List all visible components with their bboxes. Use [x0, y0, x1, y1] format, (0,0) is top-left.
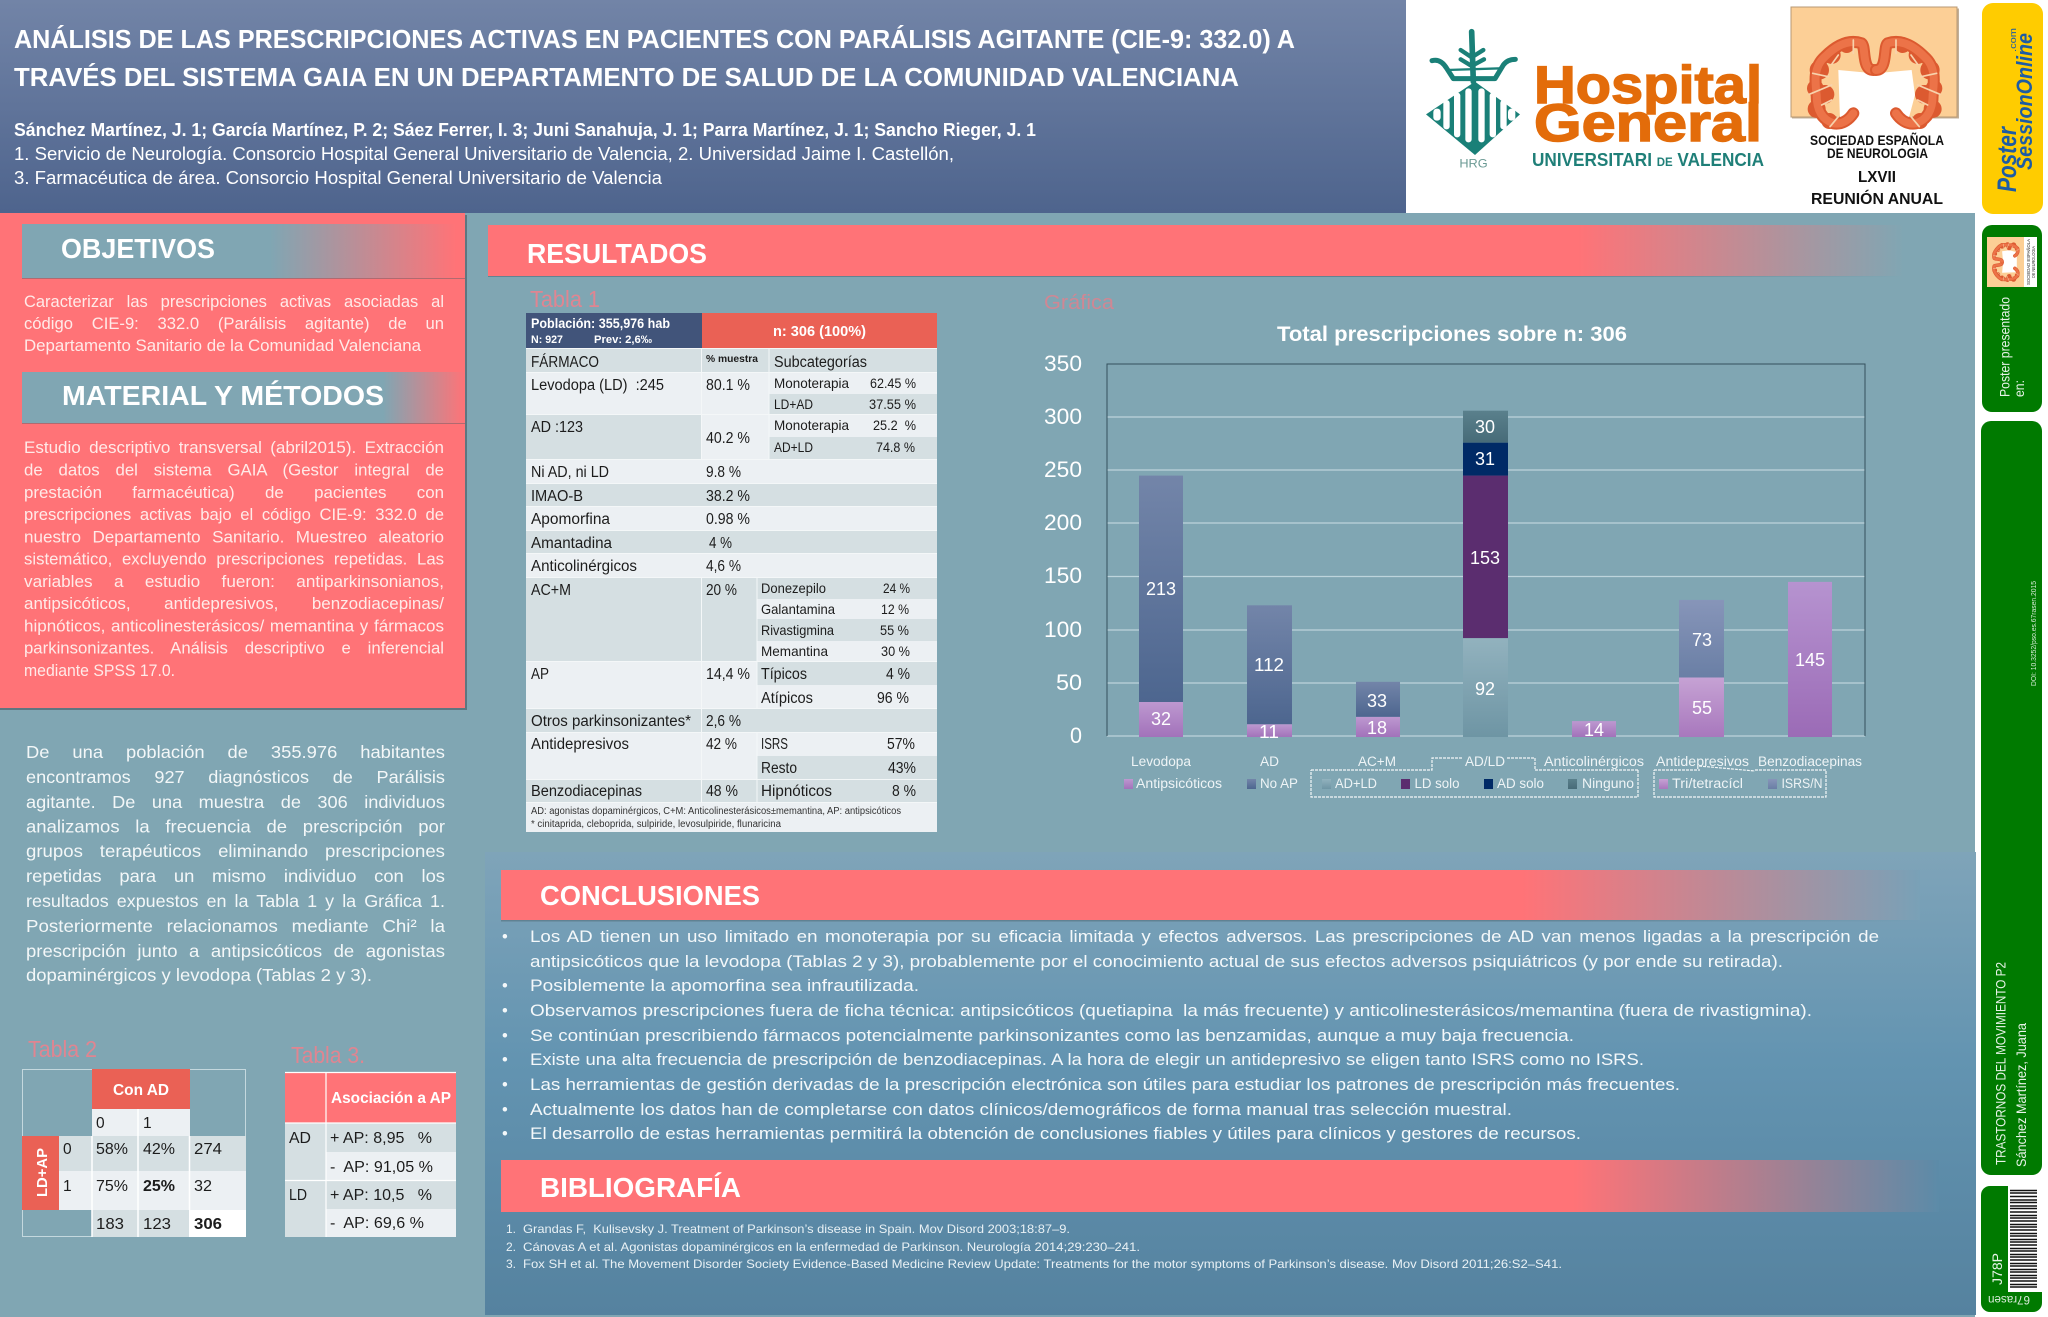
- table 2: 42%: [143, 1141, 175, 1158]
- bullets: conclusiones: •: [502, 1002, 508, 1020]
- table text: Benzodiacepinas: [531, 783, 642, 800]
- legend: [1124, 776, 1822, 791]
- barcode: [2010, 1190, 2037, 1287]
- table text: 25.2 %: [873, 417, 916, 433]
- logo: Sociedad Española de Neurología: [1791, 7, 1959, 208]
- table 1 label: Tabla 1: [530, 286, 600, 312]
- table text: Antidepresivos: [531, 736, 629, 753]
- icon: mini society logo: SOCIEDAD ESPAÑOLA: [2025, 239, 2031, 285]
- table text: IMAO-B: [531, 488, 583, 505]
- x axis labels: AD/LD: [1465, 754, 1505, 769]
- society name: DE NEUROLOGIA: [1827, 145, 1928, 161]
- heading: material y metodos: MATERIAL Y MÉTODOS: [62, 380, 384, 411]
- table header: n: 306 (100%): [773, 323, 866, 340]
- bullets: conclusiones: •: [502, 1125, 508, 1143]
- table 2: 58%: [96, 1141, 128, 1158]
- y axis labels: 100: [1044, 617, 1082, 642]
- table 2: 0: [96, 1115, 105, 1132]
- table text: % muestra: [706, 353, 758, 365]
- bar: Antidepresivos: 55: [1692, 698, 1712, 718]
- table text: 0.98 %: [706, 511, 750, 528]
- bullets: conclusiones: •: [502, 1101, 508, 1119]
- sidebar: poster session online logo: Poster: [1992, 126, 2022, 192]
- table text: 8 %: [892, 783, 916, 800]
- table text: AP: [531, 666, 549, 683]
- heading: bibliografia: [501, 1160, 1939, 1212]
- table text: Donezepilo: [761, 580, 826, 596]
- text: material y metodos: parkinsonizantes. Análisis descriptivo e inferencial: [24, 640, 444, 658]
- bullets: conclusiones: [502, 928, 1879, 1143]
- table 2: 274: [194, 1141, 222, 1158]
- heading: conclusiones: [501, 870, 1920, 922]
- table 2: 1: [143, 1115, 152, 1132]
- bullets: conclusiones: •: [502, 977, 508, 995]
- table text: 24 %: [883, 580, 910, 596]
- bar: AD/LD: 30: [1475, 417, 1495, 437]
- bar: Benzodiacepinas: [1788, 582, 1832, 737]
- table footnote: [531, 806, 901, 830]
- meeting label: REUNIÓN ANUAL: [1811, 189, 1943, 208]
- sidebar: barcode tag: [1981, 1186, 2042, 1312]
- bar: Levodopa: 32: [1151, 709, 1171, 729]
- table 2 label: Tabla 2: [28, 1036, 97, 1062]
- text: material y metodos: antipsicóticos, antidepresivos, benzodiacepinas/: [24, 595, 444, 613]
- sidebar: barcode tag: 67rasen: [1988, 1293, 2030, 1307]
- society name: [1810, 131, 1944, 161]
- x axis labels: Antidepresivos: [1656, 754, 1749, 769]
- table header: Prev: 2,6‰: [594, 334, 652, 346]
- table 1: [526, 286, 937, 832]
- text block: resultados summary: repetidas para un mismo individuo con los: [26, 866, 445, 886]
- x axis labels: [1131, 754, 1862, 769]
- bullets: conclusiones: El desarrollo de estas herramientas permitirá la obtención de conclusiones fiables y útiles para clínicos y gestores de recursos.: [530, 1125, 1581, 1143]
- table 3: [285, 1042, 456, 1237]
- table text: Memantina: [761, 643, 828, 659]
- table text: 4 %: [886, 666, 910, 683]
- bar: AD: 112: [1254, 655, 1284, 675]
- table text: 30 %: [881, 643, 910, 659]
- y axis labels: 300: [1044, 404, 1082, 429]
- sidebar: barcode tag: J78P: [1989, 1253, 2005, 1285]
- icon: brain: [1807, 37, 1942, 129]
- panel: conclusiones and bibliografia: [485, 852, 1976, 1315]
- table text: Monoterapia: [774, 417, 849, 433]
- bar: Antidepresivos: 73: [1692, 630, 1712, 650]
- text block: resultados summary: prescripción junto a antipsicóticos de agonistas: [26, 941, 445, 961]
- sidebar: poster session online logo: .com: [2008, 28, 2018, 52]
- table 3: - AP: 91,05 %: [330, 1159, 433, 1176]
- table text: 12 %: [881, 601, 909, 617]
- bar: AD: 11: [1259, 722, 1279, 742]
- text: objetivos: código CIE-9: 332.0 (Parálisis agitante) de un: [24, 315, 444, 333]
- sidebar: poster presentado en: Poster presentado: [1996, 297, 2012, 397]
- bar: Levodopa: 213: [1146, 579, 1176, 599]
- bullets: conclusiones: Las herramientas de gestión derivadas de la prescripción electrónica son útiles para estudiar los patrones de prescripción más frecuentes.: [530, 1076, 1680, 1094]
- table text: 14,4 %: [706, 666, 750, 683]
- table footnote: AD: agonistas dopaminérgicos, C+M: Anticolinesterásicos±memantina, AP: antipsicóticos: [531, 806, 901, 817]
- table text: Rivastigmina: [761, 622, 834, 638]
- legend grouping brackets: [1311, 758, 1826, 797]
- text: objetivos: [24, 293, 444, 355]
- sidebar: poster presentado en: en:: [2011, 380, 2027, 397]
- header: title and authors: [0, 0, 1406, 213]
- icon: mini society logo: [1987, 237, 2037, 287]
- table text: 48 %: [706, 783, 738, 800]
- bullets: conclusiones: Los AD tienen un uso limitado en monoterapia por su eficacia limitada y efectos adversos. Las prescripciones de AD van menos ligadas a la prescripción de: [530, 928, 1879, 946]
- x axis labels: Levodopa: [1131, 754, 1191, 769]
- table text: 74.8 %: [876, 439, 915, 455]
- bar: AD/LD: 92: [1475, 679, 1495, 699]
- bullets: conclusiones: Actualmente los datos han de completarse con datos clínicos/demográficos de forma manual tras selección muestral.: [530, 1101, 1512, 1119]
- bar: AC+M: [1356, 682, 1400, 738]
- table text: AD :123: [531, 419, 583, 436]
- table text: 37.55 %: [869, 396, 916, 412]
- text block: resultados summary: dopaminérgicos y levodopa (Tablas 2 y 3).: [26, 965, 372, 985]
- y axis labels: 50: [1056, 670, 1082, 695]
- text: objetivos: Departamento Sanitario de la Comunidad Valenciana: [24, 337, 422, 355]
- legend: LD solo: [1414, 776, 1460, 791]
- text: material y metodos: Estudio descriptivo transversal (abril2015). Extracción: [24, 439, 444, 457]
- legend: AD solo: [1497, 776, 1544, 791]
- table text: Típicos: [761, 666, 807, 683]
- wordmark: General: [1534, 94, 1762, 153]
- table footnote: * cinitaprida, cleboprida, sulpiride, levosulpiride, flunaricina: [531, 819, 781, 830]
- text block: resultados summary: De una población de 355.976 habitantes: [26, 742, 445, 762]
- table 2: LD+AP: [34, 1148, 51, 1197]
- x axis labels: Anticolinérgicos: [1544, 754, 1644, 769]
- y axis labels: 250: [1044, 457, 1082, 482]
- table 2: [22, 1036, 246, 1237]
- table text: 2,6 %: [706, 713, 741, 730]
- references: 2.: [506, 1240, 516, 1254]
- text block: resultados summary: grupos terapéuticos eliminando prescripciones: [26, 841, 445, 861]
- icon: mini society logo: DE NEUROLOGIA: [2031, 246, 2036, 278]
- table header: N: 927: [531, 334, 563, 346]
- bullets: conclusiones: Existe una alta frecuencia de prescripción de benzodiacepinas. A la hora de elegir un antidepresivo se eligen tanto ISRS como no ISRS.: [530, 1051, 1644, 1069]
- text block: resultados summary: [26, 742, 445, 985]
- table 3: AD: [289, 1130, 311, 1147]
- title: TRAVÉS DEL SISTEMA GAIA EN UN DEPARTAMENTO DE SALUD DE LA COMUNIDAD VALENCIANA: [14, 62, 1239, 92]
- table header: Población: 355,976 hab: [531, 316, 670, 331]
- bullets: conclusiones: Posiblemente la apomorfina sea infrautilizada.: [530, 977, 919, 995]
- table text: Amantadina: [531, 535, 612, 552]
- table 2: 1: [63, 1178, 72, 1195]
- references: 3.: [506, 1257, 516, 1271]
- affiliations: 3. Farmacéutica de área. Consorcio Hospital General Universitario de Valencia: [14, 168, 663, 188]
- table text: 57%: [887, 736, 915, 753]
- plot frame and gridlines: [1107, 364, 1865, 736]
- heading: bibliografia: BIBLIOGRAFÍA: [540, 1172, 741, 1203]
- legend: Tri/tetracícl: [1672, 776, 1743, 791]
- table text: 9.8 %: [706, 464, 741, 481]
- table text: Atípicos: [761, 690, 813, 707]
- sidebar: session info: [1981, 421, 2042, 1175]
- table 3: + AP: 10,5 %: [330, 1187, 432, 1204]
- title: [14, 24, 1295, 92]
- heading: conclusiones: CONCLUSIONES: [540, 880, 760, 911]
- table header: [526, 313, 937, 348]
- table text: Levodopa (LD) :245: [531, 377, 664, 394]
- text: material y metodos: prescripciones activas bajo el código CIE-9: 332.0 de: [24, 506, 444, 524]
- bullets: conclusiones: Se continúan prescribiendo fármacos potencialmente parkinsonizantes como las benzamidas, aunque a muy baja frecuencia.: [530, 1027, 1574, 1045]
- table text: 42 %: [706, 736, 737, 753]
- table text: 55 %: [880, 622, 909, 638]
- references: Cánovas A et al. Agonistas dopaminérgicos en la enfermedad de Parkinson. Neurología 2014;29:230–241.: [523, 1240, 1140, 1254]
- text: material y metodos: variables a estudio fueron: antiparkinsonianos,: [24, 573, 444, 591]
- legend: Ninguno: [1582, 776, 1634, 791]
- sidebar: poster session online logo: SessionOnline: [2012, 33, 2037, 170]
- table text: Resto: [761, 760, 797, 777]
- y axis labels: 0: [1070, 723, 1082, 748]
- table text: FÁRMACO: [531, 354, 599, 371]
- text: material y metodos: nuestro Departamento Sanitario. Muestreo aleatorio: [24, 528, 444, 546]
- table text: 40.2 %: [706, 430, 750, 447]
- references: Grandas F, Kulisevsky J. Treatment of Parkinson’s disease in Spain. Mov Disord 2003;18:87–9.: [523, 1222, 1070, 1236]
- society name: SOCIEDAD ESPAÑOLA: [1810, 131, 1944, 148]
- table 3: LD: [289, 1187, 307, 1204]
- bullets: conclusiones: •: [502, 1076, 508, 1094]
- sidebar: session info: DOI: 10.3252/pso.es.67rasen.2015: [2031, 581, 2038, 686]
- table 2: 32: [194, 1178, 212, 1195]
- table 2: 183: [96, 1216, 124, 1233]
- table text: Monoterapia: [774, 375, 849, 391]
- heading: resultados: [488, 225, 1904, 277]
- wordmark: [1532, 56, 1764, 170]
- legend: No AP: [1260, 776, 1298, 791]
- table text: 20 %: [706, 582, 737, 599]
- sidebar: session info: TRASTORNOS DEL MOVIMIENTO P2: [1992, 962, 2008, 1165]
- text: material y metodos: de datos del sistema GAIA (Gestor integral de: [24, 462, 444, 480]
- chart label: Gráfica: [1044, 292, 1115, 314]
- heading: resultados: RESULTADOS: [527, 238, 707, 269]
- references: [506, 1222, 1562, 1271]
- table text: LD+AD: [774, 396, 813, 412]
- table text: Apomorfina: [531, 511, 610, 528]
- panel: objetivos and material y metodos: [0, 213, 467, 710]
- sidebar: poster session online logo: [1982, 3, 2043, 214]
- wordmark: UNIVERSITARI DE VALENCIA: [1532, 150, 1764, 170]
- text block: resultados summary: encontramos 927 diagnósticos de Parálisis: [26, 767, 445, 787]
- table 3: - AP: 69,6 %: [330, 1215, 424, 1232]
- logo: Hospital General: [1426, 32, 1764, 170]
- affiliations: [14, 144, 954, 188]
- table text: AD+LD: [774, 439, 813, 455]
- table text: 43%: [888, 760, 916, 777]
- references: 1.: [506, 1222, 516, 1236]
- table 2: 25%: [143, 1178, 175, 1195]
- wordmark: Hospital: [1534, 56, 1762, 115]
- bullets: conclusiones: •: [502, 928, 508, 946]
- heading: objetivos: [22, 224, 465, 279]
- table text: AC+M: [531, 582, 571, 599]
- x axis labels: AD: [1260, 754, 1279, 769]
- y axis labels: 350: [1044, 351, 1082, 376]
- table text: 4,6 %: [706, 558, 741, 575]
- bar: AC+M: 18: [1367, 718, 1387, 738]
- sidebar: poster presentado en: [1982, 225, 2042, 412]
- text: material y metodos: hipnóticos, anticolinesterásicos/ memantina y fármacos: [24, 618, 444, 636]
- heading: material y metodos: [22, 372, 465, 424]
- affiliations: 1. Servicio de Neurología. Consorcio Hospital General Universitario de Valencia, 2. Universidad Jaime I. Castellón,: [14, 144, 954, 164]
- x axis labels: AC+M: [1358, 754, 1396, 769]
- bar: Anticolinergicos: 14: [1584, 720, 1604, 740]
- table text: 80.1 %: [706, 377, 750, 394]
- bar: AC+M: 33: [1367, 691, 1387, 711]
- legend: ISRS/N: [1782, 776, 1822, 791]
- table text: Hipnóticos: [761, 783, 832, 800]
- meeting label: [1811, 169, 1943, 208]
- table text: Galantamina: [761, 601, 835, 617]
- y axis labels: 200: [1044, 510, 1082, 535]
- icon: emblem: HRG: [1459, 156, 1488, 170]
- table text: Anticolinérgicos: [531, 558, 637, 575]
- text block: resultados summary: Posteriormente relacionamos mediante Chi² la: [26, 916, 445, 936]
- legend: AD+LD: [1335, 776, 1377, 791]
- table text: 4 %: [709, 535, 732, 552]
- bar: Benzodiacepinas: 145: [1795, 650, 1825, 670]
- bar: AD/LD: 153: [1470, 548, 1500, 568]
- table 2: 306: [194, 1216, 222, 1233]
- meeting label: LXVII: [1858, 169, 1896, 186]
- bar: Antidepresivos: [1679, 600, 1724, 737]
- heading: objetivos: OBJETIVOS: [61, 233, 215, 264]
- text: material y metodos: sistemático, excluyendo prescripciones repetidas. Las: [24, 550, 444, 568]
- chart title: Total prescripciones sobre n: 306: [1277, 323, 1627, 346]
- table 2: 0: [63, 1141, 72, 1158]
- bullets: conclusiones: •: [502, 1051, 508, 1069]
- table 3: Asociación a AP: [331, 1090, 451, 1107]
- legend: Antipsicóticos: [1136, 776, 1222, 791]
- table text: Subcategorías: [774, 354, 867, 371]
- title: ANÁLISIS DE LAS PRESCRIPCIONES ACTIVAS EN PACIENTES CON PARÁLISIS AGITANTE (CIE-9: 332.0) A: [14, 24, 1295, 54]
- text block: resultados summary: agitante. De una muestra de 306 individuos: [26, 792, 445, 812]
- x axis labels: Benzodiacepinas: [1758, 754, 1862, 769]
- references: Fox SH et al. The Movement Disorder Society Evidence-Based Medicine Review Update: Treatments for the motor symptoms of Parkinson’s disease. Mov Disord 2011;26:S2–S41.: [523, 1257, 1562, 1271]
- table text: ISRS: [761, 736, 788, 753]
- y axis labels: [1044, 351, 1082, 748]
- authors: Sánchez Martínez, J. 1; García Martínez, P. 2; Sáez Ferrer, I. 3; Juni Sanahuja, J. 1; Parra Martínez, J. 1; Sancho Rieger, J. 1: [14, 120, 1036, 140]
- table text: 62.45 %: [870, 375, 916, 391]
- bullets: conclusiones: •: [502, 1027, 508, 1045]
- table text: 96 %: [877, 690, 909, 707]
- text: material y metodos: [24, 439, 444, 680]
- table 2: 75%: [96, 1178, 128, 1195]
- text: objetivos: Caracterizar las prescripciones activas asociadas al: [24, 293, 444, 311]
- bar: AD/LD: 31: [1475, 449, 1495, 469]
- bar: Levodopa: [1139, 476, 1183, 737]
- bullets: conclusiones: Observamos prescripciones fuera de ficha técnica: antipsicóticos (quetiapina la más frecuente) y anticolinesterásicos/memantina (fuera de rivastigmina).: [530, 1002, 1812, 1020]
- text block: resultados summary: resultados expuestos en la Tabla 1 y la Gráfica 1.: [26, 891, 445, 911]
- table text: Ni AD, ni LD: [531, 464, 609, 481]
- chart: total prescripciones: [1044, 292, 1865, 797]
- bar: Anticolinergicos: [1572, 720, 1616, 740]
- bar: AD/LD: [1463, 411, 1508, 737]
- table 2: Con AD: [113, 1082, 169, 1099]
- text: material y metodos: mediante SPSS 17.0.: [24, 662, 175, 680]
- table text: 38.2 %: [706, 488, 750, 505]
- table rows: [526, 348, 937, 832]
- text: material y metodos: prestación farmacéutica) de pacientes con: [24, 484, 444, 502]
- table text: Otros parkinsonizantes*: [531, 713, 691, 730]
- table 3 label: Tabla 3.: [291, 1042, 365, 1068]
- bar: AD: [1247, 605, 1292, 742]
- table text: [531, 353, 916, 800]
- icon: emblem: [1426, 32, 1520, 170]
- bullets: conclusiones: antipsicóticos que la levodopa (Tablas 2 y 3), probablemente por el conocimiento actual de sus efectos adversos psiquiátricos (y por ende su retirada).: [530, 953, 1783, 971]
- text block: resultados summary: analizamos la frecuencia de prescripción por: [26, 816, 445, 836]
- table 2: 123: [143, 1216, 171, 1233]
- table 3: + AP: 8,95 %: [330, 1130, 432, 1147]
- sidebar: session info: Sánchez Martínez, Juana: [2013, 1023, 2029, 1167]
- y axis labels: 150: [1044, 563, 1082, 588]
